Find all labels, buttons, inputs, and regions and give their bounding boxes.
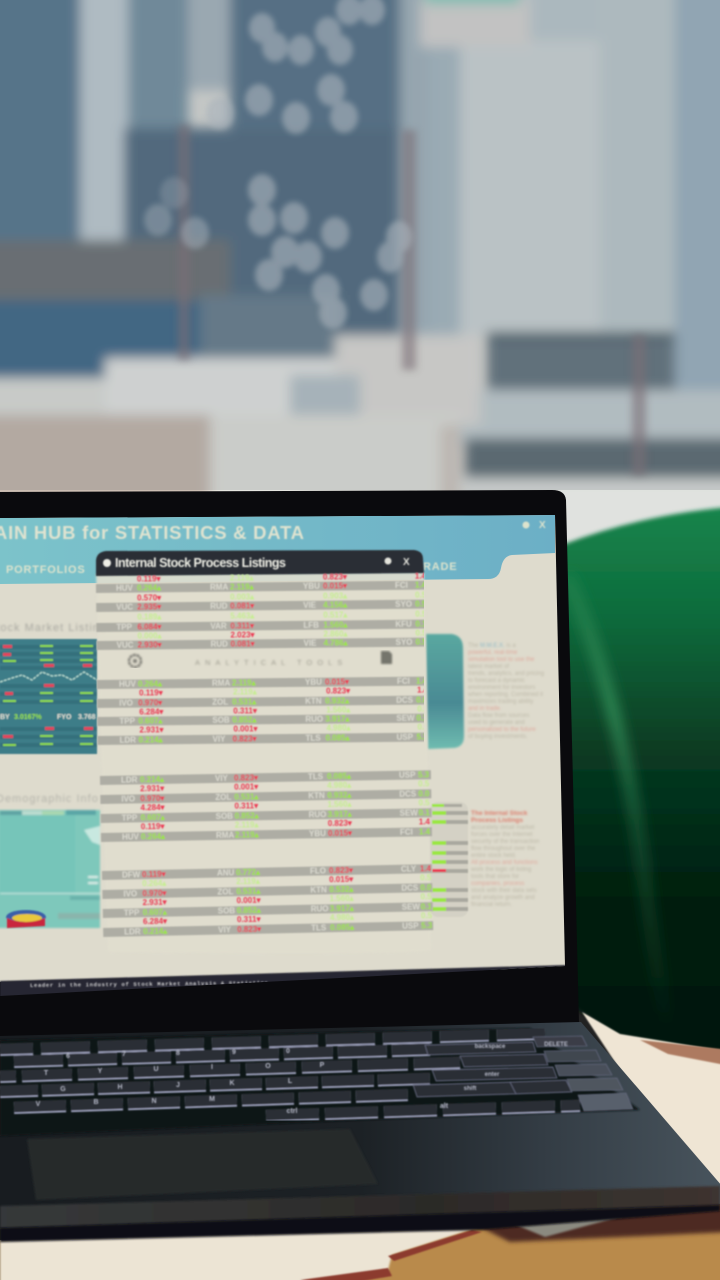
listings table group 4: 0.085▴ [330,923,355,932]
listings table group 1: 0.003▴ [230,592,255,602]
listings table group 2: SOB [212,716,230,725]
key legends: 7 [122,1051,126,1058]
listings table group 1: 5.463▴ [230,611,255,621]
intro paragraph: and in trade. [468,706,502,712]
listings table group 3: TLS [308,772,324,781]
listings table group 1: TPP [116,623,133,632]
listings table group 3: LDR [121,775,138,785]
listings table group 4: FLO [310,866,326,876]
listings table group 1: 0.5 [415,610,427,619]
listings table group 2: 0.531▴ [232,697,257,707]
listings table group 3: RUO [309,810,326,819]
key legends: 0 [286,1048,290,1055]
listings table group 3: YBU [309,829,326,838]
listings table group 1: 0.903▴ [323,591,348,601]
popup title: Internal Stock Process Listings [115,556,286,570]
listings table group 4: 0.0 [420,883,432,892]
listings table group 2: 6.284▾ [139,707,164,717]
key legends: I [211,1064,213,1071]
listings paragraph: accurately detail market [471,825,535,831]
listings table group 4: KTN [310,885,327,895]
listings table group 2: KTN [305,697,322,706]
listings table group 2: 3.917▴ [325,714,350,724]
listings table group 1: 2.930▾ [138,640,163,650]
key legends: G [60,1086,66,1093]
listings table group 4: 0.264▴ [142,879,167,888]
listings table group 2: 0.932▴ [325,696,350,706]
listings table group 3: TPP [122,813,138,823]
listings table group 4: 0.5 [420,892,432,901]
listings table group 2: USP [397,733,414,742]
listings paragraph: flow throughout over the [471,846,536,852]
listings paragraph: tools that store for [471,874,519,880]
screen background [0,515,566,982]
listings table group 4: 1.4 [420,864,432,873]
listings table group 3: 1.560▴ [327,800,353,809]
listings table group 4: 0.772▴ [236,868,261,877]
listings table group 2: 5.3 [417,733,428,742]
key legends: T [44,1070,49,1077]
laptop deck [0,1022,720,1240]
listings table group 2: LDR [120,736,136,745]
popup controls: X [403,557,410,568]
listings table group 1: 2.023▾ [230,630,256,640]
listings paragraph: and analyze growth and [471,895,535,901]
popup controls [384,557,410,568]
listings table group 2: HUV [119,680,137,689]
listings table group 1: 0.081▾ [231,639,256,649]
key legends: L [288,1078,293,1085]
listings table group 4 [102,864,433,937]
listings table group 1: 0.5 [415,600,427,609]
listings table group 2: 1.4 [416,677,428,686]
listings table group 3 [100,770,432,842]
key legends: shift [464,1086,476,1092]
listings table group 2: 0.311▾ [233,706,258,716]
listings table group 2: TLS [306,734,321,743]
listings table group 1: LFB [303,621,319,630]
listings table group 4: CLY [401,864,417,874]
listings table group 1: 0.119▾ [137,574,162,584]
listings table group 4: 0.5 [421,911,433,920]
footer strip [0,965,566,997]
analytical tools strip [129,651,392,667]
listings table group 3: 0.531▴ [234,792,259,802]
listings table group 1: YBU [303,582,320,591]
listings table group 3: IVO [121,794,135,804]
listings table group 3: 5.3 [418,770,430,779]
listings paragraph: work the logic of listing [470,867,531,873]
intro paragraph: environment for investors [468,685,535,691]
listings table group 1: 0.5 [416,638,427,647]
listings table group 4: TPP [124,908,140,918]
listings table group 3: USP [399,770,416,780]
key legends: V [36,1101,41,1108]
listings paragraph: stock with their data sets [471,888,537,894]
listings table group 4: 0.1 [421,902,433,911]
listings table group 3: 2.119▴ [235,830,260,840]
listings table group 4: VIY [218,925,232,935]
listings table group 3: KTN [308,791,325,800]
listings table group 2: 0.119▾ [139,688,164,698]
listings table group 2: 2.119▴ [232,678,257,688]
listings table group 4: 4.980▴ [330,913,355,922]
listings table group 4: 5.3 [421,921,433,930]
listings table group 1: VIE [304,639,317,648]
listings table group 1: 1.560▴ [323,620,348,630]
listings table group 1: 2.860▴ [323,629,349,639]
listings table group 1: VAR [210,622,227,631]
listings table group 1: 1.4 [415,572,427,581]
listings table group 2: 1.4 [417,686,429,695]
listings table group 4: 0.607▴ [143,908,168,917]
listings table group 1: SYO [395,600,412,609]
listings table group 2: 2.931▾ [139,725,165,735]
listings table group 3: 0.970▾ [140,794,165,803]
listings table group 4: SEW [402,902,421,912]
stock listings popup window [96,550,433,953]
listings table group 1 [96,571,432,650]
icon: document [381,651,392,664]
listings table group 1: KFU [395,620,412,629]
listings table group 4: 6.284▾ [143,917,168,926]
stock market chart panel: FYO [57,714,72,721]
demographic map panel [0,810,100,928]
listings table group 2: 0.852▴ [232,715,257,725]
listings table group 1: RUD [211,640,228,649]
intro paragraph [467,643,544,740]
listings table group 3: 0.311▾ [234,801,259,811]
listings table group 2: TPP [119,717,136,726]
listings table group 4: DFW [122,870,141,880]
listings table group 1: RMA [210,583,228,592]
listings table group 3: RMA [216,831,235,840]
listings paragraph: entire stock held. [471,853,517,859]
screen [0,515,566,997]
listings table group 1: 0.189▴ [137,612,162,622]
listings table group 3: 2.119▴ [235,820,259,830]
listings table group 2: 0.823▾ [233,734,258,744]
listings table group 4: IVO [123,889,137,899]
listings table group 4: 3.917▴ [330,904,355,913]
key legends: J [176,1082,180,1089]
listings table group 1: VIE [303,601,317,610]
listings table group 2: 1.560▴ [326,705,351,715]
listings table group 4: 0.823▾ [329,866,354,875]
listings table group 2: 0.264▴ [138,679,163,689]
listings table group 2: 0.085▴ [326,733,351,743]
listings table group 1: RUD [210,602,228,611]
intro paragraph: Data flow from sources [468,713,529,719]
listings table group 3: 0.264▴ [141,832,166,841]
listings table group 4: TLS [311,923,327,933]
green velvet armchair [562,507,720,1056]
laptop lid bezel [0,490,579,1040]
window controls: X [539,520,546,531]
listings table group 1: 0.15 [415,619,432,629]
listings table group 3: 2.931▾ [140,784,165,793]
key legends: P [320,1062,325,1069]
listings table group 1: 1.4 [415,581,427,590]
key legends: 6 [66,1053,70,1060]
intro paragraph: personalized to the future [468,727,536,733]
listings paragraph: financial return. [471,902,512,908]
listings table group 3: SEW [400,808,418,818]
listings table group 1: 0.000▴ [137,631,163,641]
intro paragraph: maximizes trading ability [468,699,533,705]
listings table group 1: 0.823▾ [323,572,348,582]
listings table group 1: FCI [395,581,408,590]
listings table group 4: 2.931▾ [142,898,168,907]
right chart panel [426,634,464,749]
listings table group 3: 0.852▴ [235,811,260,821]
desk surface with papers [0,1012,720,1280]
key legends: O [265,1063,271,1070]
right striped table thumbnail [430,802,468,917]
listings table group 1: 4.156▴ [323,600,348,610]
listings table group 2: 0.970▾ [138,698,163,708]
listings table group 1: 2.935▾ [137,602,162,612]
intro paragraph: latest market of [468,664,509,670]
listings table group 1: 0.311▾ [230,621,255,631]
intro paragraph: trends, analytics, and pricing [468,671,544,677]
listings table group 3: 0.823▾ [328,819,353,828]
window controls [522,520,546,531]
listings table group 3: 0.0 [418,789,430,798]
listings table group 1: 6.084▾ [137,622,162,632]
listings table group 3: 0.214▴ [140,775,165,784]
listings table group 3: 1.4 [419,817,431,826]
listings paragraph: All process and functions [471,860,538,866]
listings paragraph: The Internal Stock [471,810,528,817]
blurred city skyline background [0,0,720,648]
listings table group 2: 0.5 [417,705,429,714]
key legends: DELETE [544,1042,568,1048]
key legends: M [209,1096,215,1103]
listings table group 2: 0.001▾ [233,724,259,734]
listings table group 3: ZOL [215,793,232,802]
listings table group 3: 0.5 [418,779,430,788]
listings table group 1: 0.264▴ [137,583,162,593]
listings table group 2: VIY [213,735,226,744]
intro paragraph: The M.M.E.X. is a [468,643,516,649]
listings table group 4: 0.214▴ [143,927,168,936]
listings table group 4: 0.823▾ [237,925,262,934]
listings table group 3: 0.085▴ [327,772,352,781]
listings table group 4: 1.560▴ [329,894,355,903]
listings table group 1: HUV [116,584,134,593]
listings table group 4: 0.119▾ [142,870,167,879]
listings table group 3: 4.284▾ [140,803,166,812]
listings table group 2: RMA [212,679,230,688]
stock market chart panel: BY [0,714,10,721]
listings table group 3: 4.980▴ [327,781,352,790]
intro paragraph: powerful, real-time [468,650,518,656]
listings table group 1: 0.517▴ [323,610,348,620]
intro paragraph: when reporting. Combined it [467,692,543,698]
popup body [94,572,428,749]
listings paragraph: Process Listings [471,817,523,824]
listings table group 4: 0.532▴ [329,885,354,894]
listings table group 4: 0.015▾ [329,875,354,884]
listings table group 2: YBU [305,678,322,687]
listings table group 2: 0.214▴ [139,735,164,745]
stock market chart panel: 3.768 [78,714,96,721]
icon: pie chart [6,910,46,928]
listings table group 2: 0.5 [417,723,429,732]
listings table group 2: 2.119▴ [233,687,258,697]
listings table group 4: RUO [311,904,329,914]
listings table group 1: SYO [396,638,413,647]
listings paragraph: security of the transaction [471,839,539,845]
icon: gear [129,655,141,667]
listings table group 4: DCS [401,883,419,893]
listings table group 3: 3.917▴ [328,810,353,819]
listings table group 4: ZOL [217,887,234,897]
listings table group 3: 0.119▾ [141,822,165,831]
listings table group 4: 0.5 [420,873,432,882]
listings table group 1: 0.5 [415,629,427,638]
listings table group 3: 1.4 [419,827,431,836]
listings table group 1: 0.015▾ [323,581,348,591]
listings table group 1: 4.786▴ [324,638,349,648]
listings table group 4: LDR [124,927,141,937]
intro paragraph: used to generate and [468,720,525,726]
stock market chart panel [0,639,97,754]
listings table group 4: SOB [218,906,235,916]
listings table group 4: USP [402,921,419,931]
listings table group 1: VUC [116,603,133,612]
intro paragraph: to forecast a dynamic [468,678,525,684]
listings table group 2: IVO [119,699,133,708]
listings table group 1: 0.081▾ [230,601,255,611]
listings table group 2: 0.607▴ [138,716,163,726]
listings table group 4: 0.970▾ [142,889,168,898]
key legends: alt [440,1103,449,1110]
listings table group 3: 0.932▴ [327,791,352,800]
laptop front edge [0,1186,720,1229]
key legends: B [93,1099,99,1106]
listings table group 3: 0.823▾ [234,773,259,783]
intro paragraph: simulation tool to use the [468,657,535,663]
listings table group 3: 0.001▾ [234,782,259,792]
listings table group 3: HUV [122,832,140,842]
listings table group 4: ANU [217,868,235,878]
key legends: 9 [232,1049,236,1056]
listings table group 1: VUC [117,641,134,650]
listings table group 3: DCS [399,789,417,799]
stock market chart panel: 3.0167% [14,714,42,721]
listings table group 1: 2.119▴ [230,573,255,583]
listings table group 1: 2.119▴ [230,582,255,592]
listings paragraph: companies, process [471,881,524,887]
key legends: K [229,1080,235,1087]
listings table group 2: RUO [305,715,323,724]
key legends: ctrl [287,1108,297,1115]
listings table group 2: DCS [396,696,414,705]
listings table group 1: 0.570▾ [137,593,162,603]
nav item: portfolios: PORTFOLIOS [6,564,86,576]
key legends: N [151,1098,157,1105]
listings table group 4: 2.119▴ [236,877,261,886]
tools label: ANALYTICAL TOOLS [195,658,347,667]
listings table group 3: SOB [216,812,233,821]
listings table group 3: 0.015▾ [328,829,353,838]
listings table group 4: 0.001▾ [236,896,262,905]
listings table group 2: FCI [397,677,410,686]
key legends: 8 [176,1050,180,1057]
listings table group 1: 0.5 [415,591,427,600]
nav item: trade: RADE [423,561,457,573]
listings table group 3: FCI [400,828,413,837]
popup title bar [96,550,424,576]
web header banner [0,515,555,584]
listings table group 2 [97,676,433,745]
listings table group 3: VIY [215,774,229,783]
listings table group 3: 0.5 [418,798,430,807]
listings table group 3: 0.607▴ [141,813,166,822]
listings table group 3: 0.1 [419,808,430,817]
listings paragraph: forces over the Internet [471,832,533,838]
laptop [0,490,720,1242]
key legends: backspace [475,1044,506,1050]
keyboard well [0,1028,640,1136]
listings table group 2: 0.823▾ [326,686,351,696]
key legends [36,1042,568,1115]
listings table group 2: 0.1 [416,714,428,723]
key legends: Y [98,1068,103,1075]
laptop underside shadow [0,1205,720,1242]
key legends: H [117,1084,123,1091]
trackpad [27,1129,378,1200]
listings table group 2: SEW [396,714,415,723]
key legends: enter [485,1072,500,1078]
listings table group 2: 4.980▴ [326,723,352,733]
listings table group 4: 0.852▴ [237,906,262,915]
footer text: Leader in the industry of Stock Market Analysis & Statistics [30,980,269,989]
listings table group 2: 0.0 [416,696,428,705]
listings paragraph [470,810,539,908]
keyboard [0,1033,633,1116]
listings table group 4: 0.311▾ [237,915,262,924]
header title: AIN HUB for STATISTICS & DATA [0,522,304,543]
listings table group 4: 0.531▴ [236,887,261,896]
listings table group 2: ZOL [212,698,228,707]
listings table group 2: 0.015▾ [325,677,350,687]
intro paragraph: of buying investments. [468,734,528,740]
key legends: U [153,1066,159,1073]
